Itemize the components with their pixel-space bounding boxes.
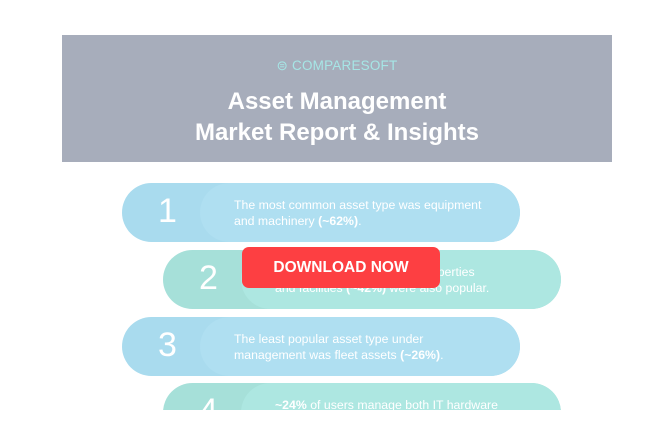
download button [242, 247, 440, 288]
download button: DOWNLOAD NOW [273, 259, 409, 276]
item 4 [163, 383, 561, 442]
title: Market Report & Insights [195, 119, 479, 146]
title [195, 88, 479, 146]
title: Asset Management [228, 88, 446, 115]
logo: ⊜ COMPARESOFT [277, 58, 397, 73]
item 1: 1 [158, 192, 177, 230]
item 2 [163, 250, 561, 309]
header [62, 35, 612, 162]
item 1: and machinery (~62%). [234, 214, 361, 228]
item 1: The most common asset type was equipment [234, 198, 481, 212]
item 1 [122, 183, 520, 242]
item 3: 3 [158, 326, 177, 364]
item 2: and facilities (~42%) were also popular. [275, 281, 489, 295]
item 3: management was fleet assets (~26%). [234, 348, 444, 362]
item 3 [122, 317, 520, 376]
item 3: The least popular asset type under [234, 332, 423, 346]
item 2: 2 [199, 259, 218, 297]
item 2: Real estate, buildings and properties [275, 265, 475, 279]
